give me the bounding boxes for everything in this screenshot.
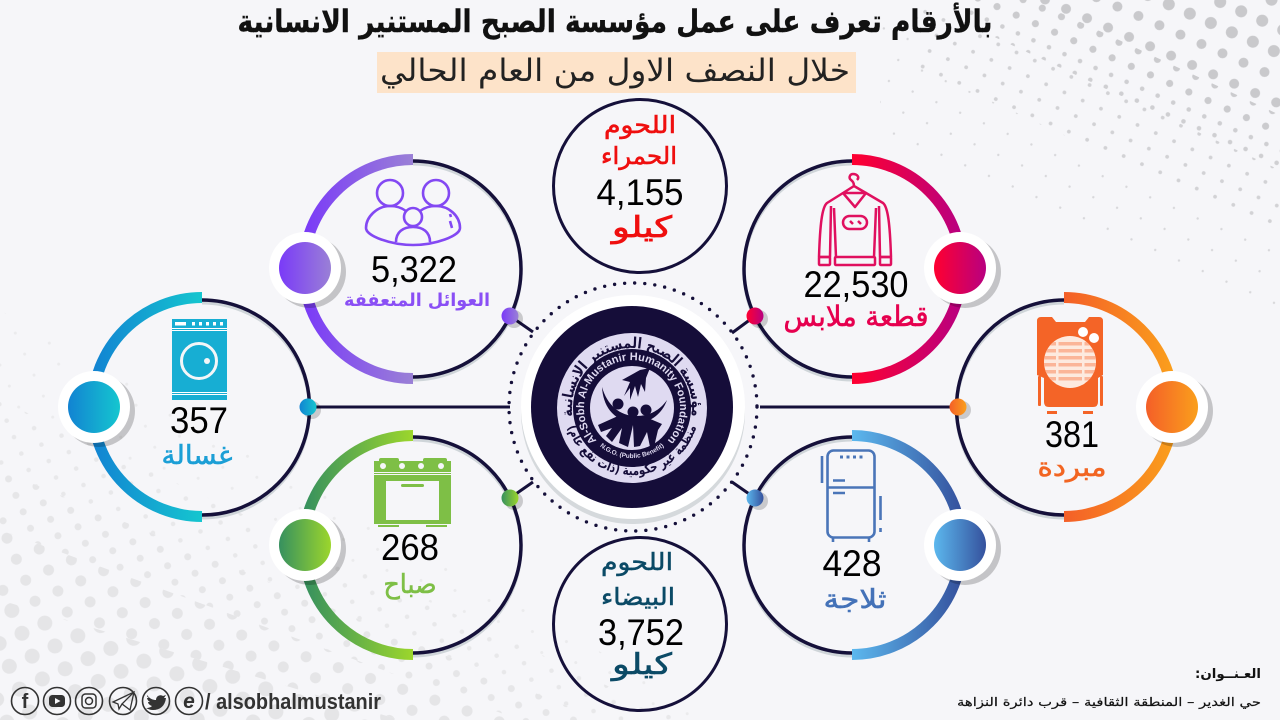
label: white meat xyxy=(601,548,675,611)
address xyxy=(957,667,1261,710)
label: white meat: اللحوم xyxy=(601,548,673,576)
social media bar xyxy=(12,688,381,714)
central logo xyxy=(507,281,759,533)
value: 4,155 xyxy=(596,172,684,213)
icon: instagram xyxy=(82,694,96,708)
icon: youtube xyxy=(49,695,65,707)
title: بالأرقام تعرف على عمل مؤسسة الصبح المستنير الانسانية xyxy=(238,2,992,40)
label: white meat: البيضاء xyxy=(601,583,675,611)
address: حي الغدير – المنطقة الثقافية – قرب دائرة النزاهة xyxy=(957,695,1261,710)
icon: facebook: f xyxy=(22,691,29,713)
handle: / alsobhalmustanir xyxy=(205,689,381,714)
icon: air cooler xyxy=(1037,317,1103,414)
label: قطعة ملابس xyxy=(784,300,928,333)
panel: stove (green) xyxy=(269,436,523,656)
value: 5,322 xyxy=(371,249,457,290)
icon: twitter xyxy=(146,695,166,710)
value: 268 xyxy=(381,527,439,568)
panel: white meat xyxy=(554,538,726,710)
value: 3,752 xyxy=(598,612,684,653)
icon: hoodie xyxy=(819,174,891,265)
icon: website: e xyxy=(183,690,195,713)
label: ثلاجة xyxy=(824,585,886,615)
label: red meat xyxy=(601,111,677,170)
connector lines xyxy=(308,316,958,498)
icon: refrigerator xyxy=(822,450,880,542)
panel: clothes (red) xyxy=(744,160,1001,380)
central logo: N.G.O. (Public Benefit) xyxy=(600,443,664,458)
label: العوائل المتعففة xyxy=(344,290,490,311)
unit: كيلو xyxy=(609,210,672,244)
label: red meat: اللحوم xyxy=(604,111,676,139)
panel: air cooler (orange) xyxy=(950,298,1213,518)
panel: families (purple) xyxy=(269,160,523,380)
value: 428 xyxy=(822,543,882,584)
label: صباح xyxy=(384,570,436,600)
value: 381 xyxy=(1045,414,1099,455)
address: العـنــوان: xyxy=(1195,667,1261,682)
panel: red meat xyxy=(554,100,726,272)
value: 357 xyxy=(170,400,228,441)
value: 22,530 xyxy=(804,264,908,305)
panel: washing machine (teal) xyxy=(58,298,321,518)
panel: refrigerator (blue) xyxy=(744,436,1001,656)
central logo: مؤسسة الصبح المستنير الانسانية xyxy=(562,336,701,416)
icon: telegram xyxy=(113,692,134,710)
central logo: منظمة غير حكومية (ذات نفع عام) xyxy=(566,426,696,478)
label: مبردة xyxy=(1038,453,1106,483)
icon: family xyxy=(366,180,460,245)
central logo: Al-Sobh Al-Mustanir Humanity Foundation xyxy=(576,352,688,444)
label: red meat: الحمراء xyxy=(601,142,677,170)
label: غسالة xyxy=(162,441,232,471)
subtitle: خلال النصف الاول من العام الحالي xyxy=(380,53,850,89)
icon: washing machine xyxy=(172,319,227,400)
unit: كيلو xyxy=(609,647,672,681)
icon: stove xyxy=(374,458,451,527)
